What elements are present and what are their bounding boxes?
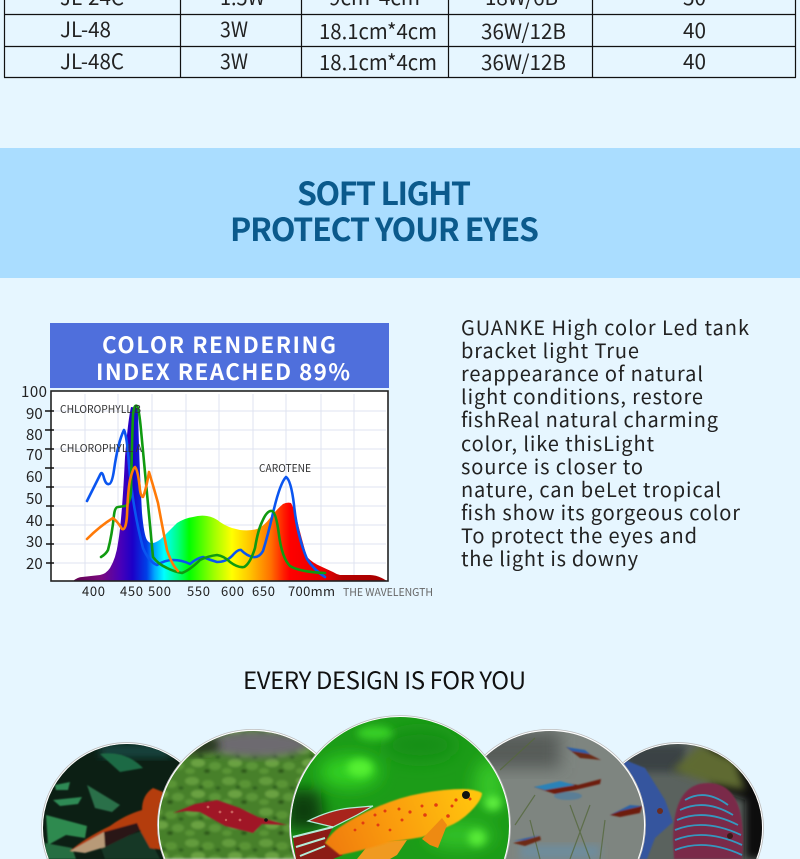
description paragraph: source is closer to bbox=[461, 451, 643, 480]
specification table: JL-48 bbox=[60, 14, 111, 44]
y axis values: 40 bbox=[26, 510, 43, 531]
banner heading bbox=[230, 169, 539, 251]
x axis values: 400 bbox=[82, 581, 105, 600]
chart heading: color rendering index bbox=[50, 323, 389, 388]
spectrum fill bbox=[73, 407, 387, 581]
banner: soft light bbox=[0, 148, 800, 278]
description paragraph: fish show its gorgeous color bbox=[461, 497, 740, 526]
photo: red shrimp on moss bbox=[157, 729, 316, 859]
specification table: 18.1cm*4cm bbox=[319, 47, 437, 77]
specification table: 3W bbox=[220, 14, 248, 44]
pigment labels: CHLOROPHYLL A bbox=[60, 441, 143, 456]
fish body bbox=[325, 789, 482, 855]
blue curve bbox=[87, 430, 325, 577]
x axis values: 650 bbox=[252, 581, 275, 600]
specification table: JL-48C bbox=[60, 46, 124, 76]
specification table bbox=[4, 0, 796, 78]
specification table: 36W/12B bbox=[481, 16, 566, 46]
description paragraph: nature, can beLet tropical bbox=[461, 474, 721, 503]
specification table: 40 bbox=[683, 15, 706, 45]
pectoral fin bbox=[422, 818, 447, 848]
description paragraph: fishReal natural charming bbox=[461, 404, 718, 433]
photo: guppy bbox=[41, 742, 181, 859]
y axis values bbox=[21, 381, 47, 574]
y axis values: 30 bbox=[26, 531, 43, 552]
section heading: every design: EVERY DESIGN IS FOR YOU bbox=[243, 661, 526, 696]
y axis values: 70 bbox=[26, 444, 43, 465]
x axis values bbox=[82, 581, 433, 600]
banner heading: SOFT LIGHT bbox=[297, 169, 471, 215]
x axis values: 500 bbox=[148, 581, 171, 600]
chart heading: color rendering index: COLOR RENDERING bbox=[102, 328, 336, 360]
chart heading: color rendering index: INDEX REACHED 89% bbox=[96, 355, 350, 387]
lower fin bbox=[357, 840, 407, 859]
y axis values: 90 bbox=[26, 403, 43, 424]
photo: orange killifish bbox=[285, 712, 515, 859]
photo: neon tetras bbox=[484, 729, 646, 859]
specification table: 36W/12B bbox=[481, 47, 566, 77]
spectrum chart bbox=[21, 381, 433, 600]
x axis values: 600 bbox=[221, 581, 244, 600]
description paragraph: color, like thisLight bbox=[461, 428, 654, 457]
description paragraph: To protect the eyes and bbox=[461, 520, 697, 549]
y axis values: 20 bbox=[26, 553, 43, 574]
pigment labels: CAROTENE bbox=[259, 461, 311, 476]
axis ticks bbox=[45, 411, 54, 563]
x axis values: 700mm bbox=[288, 581, 335, 600]
photo: discus bbox=[622, 742, 764, 859]
chart frame bbox=[51, 391, 388, 581]
description paragraph: the light is downy bbox=[461, 543, 639, 572]
top fin bbox=[308, 806, 373, 827]
description paragraph: bracket light True bbox=[461, 335, 639, 364]
description paragraph: reappearance of natural bbox=[461, 358, 703, 387]
y axis values: 80 bbox=[26, 424, 43, 445]
description paragraph: GUANKE High color Led tank bbox=[461, 312, 749, 341]
tail bbox=[293, 827, 343, 859]
specification table: 18.1cm*4cm bbox=[319, 16, 437, 46]
x axis values: THE WAVELENGTH bbox=[343, 585, 433, 600]
description paragraph: light conditions, restore bbox=[461, 381, 703, 410]
specification table: 40 bbox=[683, 46, 706, 76]
y axis values: 60 bbox=[26, 466, 43, 487]
pigment labels: CHLOROPHYLL B bbox=[60, 402, 141, 417]
specification table: 3W bbox=[220, 46, 248, 76]
green curve bbox=[101, 406, 325, 573]
x axis values: 550 bbox=[187, 581, 210, 600]
x axis values: 450 bbox=[120, 581, 143, 600]
banner heading: PROTECT YOUR EYES bbox=[230, 205, 539, 251]
pigment labels bbox=[60, 402, 311, 476]
y axis values: 50 bbox=[26, 488, 43, 509]
y axis values: 100 bbox=[21, 381, 47, 402]
orange curve bbox=[87, 467, 178, 571]
description paragraph bbox=[461, 312, 749, 572]
